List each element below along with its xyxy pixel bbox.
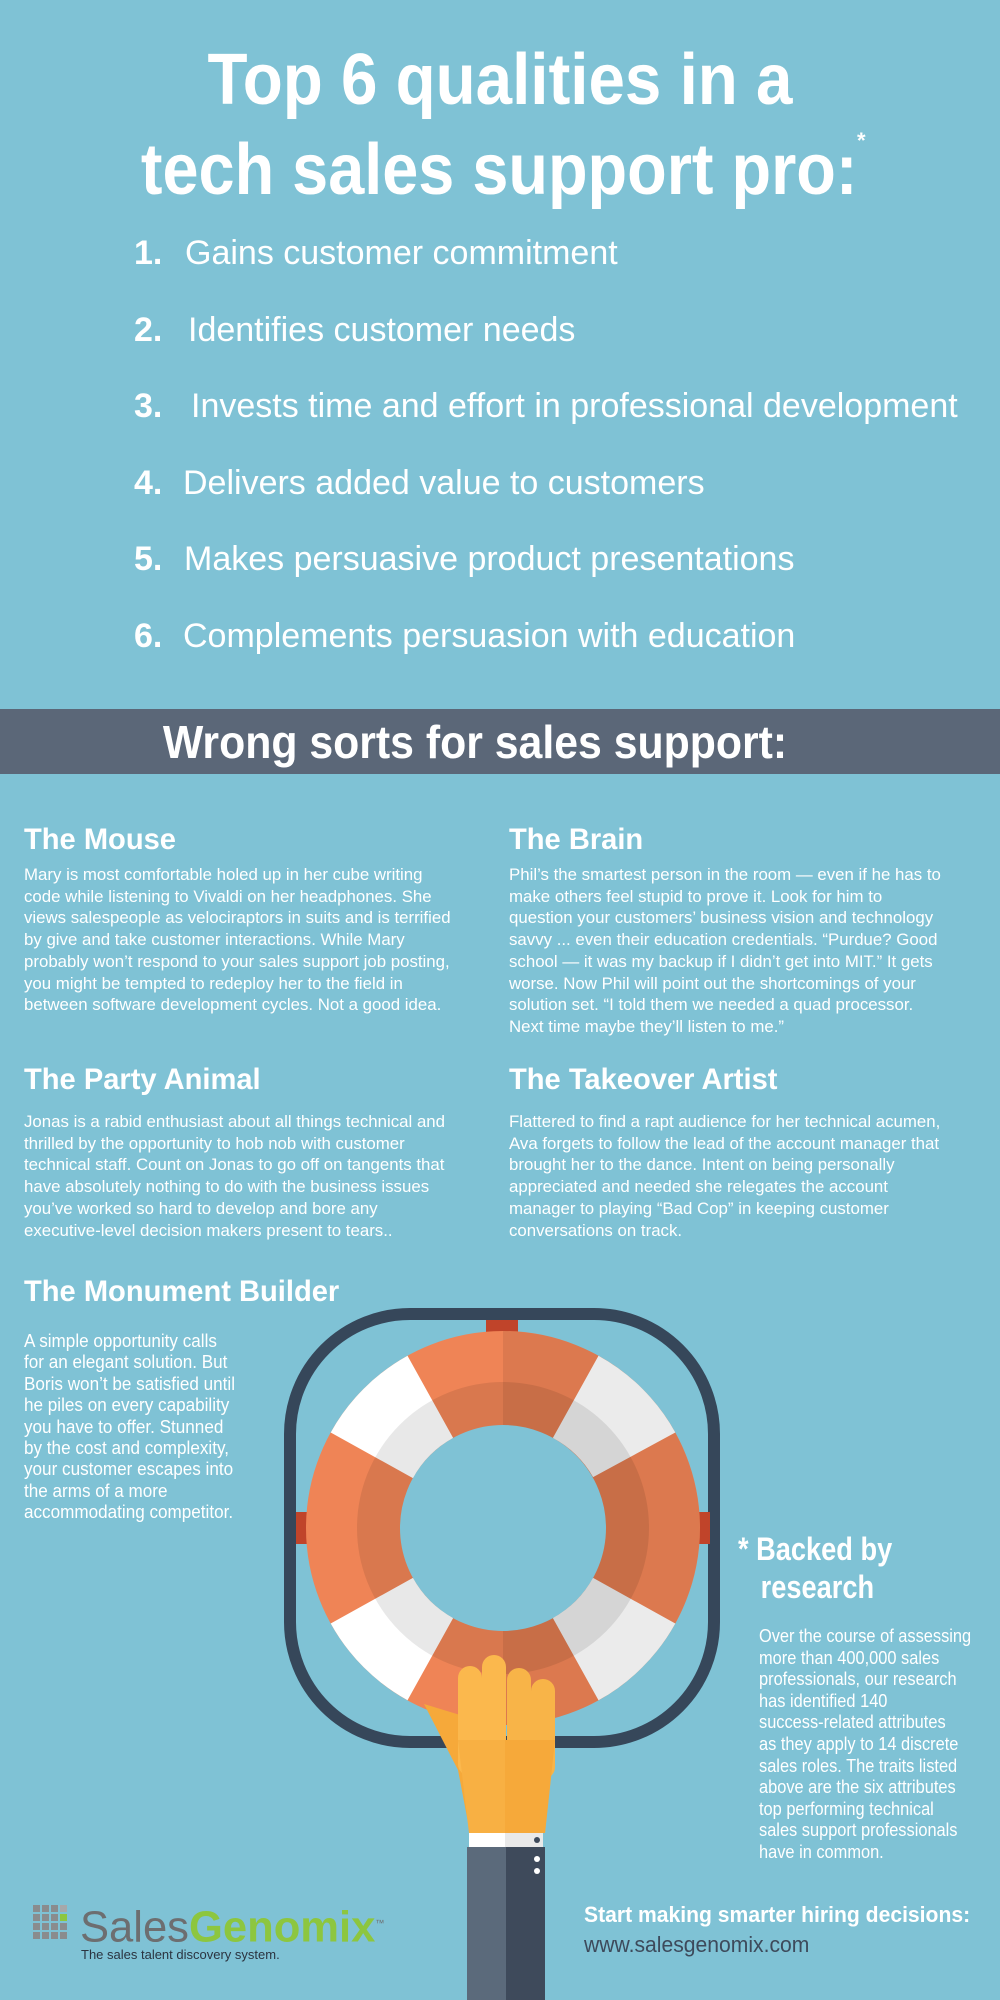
text: party animal: have absolutely nothing to do with the business issues	[24, 1177, 429, 1196]
text: research: as they apply to 14 discrete	[759, 1734, 958, 1754]
qualities list: Identifies customer needs	[188, 311, 575, 349]
text: research: have in common.	[759, 1842, 884, 1862]
hand	[424, 1655, 555, 1833]
text: brain: savvy ... even their education credentials. “Purdue? Good	[509, 930, 937, 949]
text: takeover artist	[509, 1112, 940, 1240]
text: takeover artist: appreciated and needed she relegates the account	[509, 1177, 888, 1196]
heading: backed by research: research	[761, 1569, 874, 1605]
text: brain: solution set. “I told them we needed a quad processor.	[509, 995, 913, 1014]
panel: the party animal	[24, 1063, 445, 1240]
heading: backed by research: * Backed by	[738, 1531, 892, 1567]
text: research: sales roles. The traits listed	[759, 1756, 957, 1776]
heading: party animal: The Party Animal	[24, 1063, 261, 1096]
item 1: 1.	[134, 234, 162, 272]
title: *	[857, 128, 866, 153]
text: monument builder: accommodating competitor.	[24, 1502, 233, 1522]
qualities list: Invests time and effort in professional development	[191, 387, 958, 425]
text: party animal: Jonas is a rabid enthusiast about all things technical and	[24, 1112, 445, 1131]
text: monument builder: for an elegant solution. But	[24, 1352, 227, 1372]
text: monument builder: A simple opportunity calls	[24, 1331, 217, 1351]
panel: the mouse	[24, 823, 451, 1014]
text: research: Over the course of assessing	[759, 1626, 971, 1646]
text: monument builder: the arms of a more	[24, 1481, 168, 1501]
text: brain: Phil’s the smartest person in the room — even if he has to	[509, 865, 941, 884]
text: mouse: views salespeople as velociraptors in suits and is terrified	[24, 908, 451, 927]
text: brain: school — it was my backup if I didn’t get into MIT.” It gets	[509, 952, 933, 971]
qualities list	[134, 234, 958, 655]
text: party animal	[24, 1112, 445, 1240]
item 3	[134, 387, 958, 425]
call to action: www.salesgenomix.com	[584, 1932, 809, 1957]
text: takeover artist: conversations on track.	[509, 1221, 682, 1240]
text: brain: Next time maybe they’ll listen to me.”	[509, 1017, 784, 1036]
item 4: 4.	[134, 464, 162, 502]
title: Top 6 qualities in a	[208, 40, 792, 120]
text: monument builder: Boris won’t be satisfied until	[24, 1374, 235, 1394]
wordmark: SalesGenomix™	[80, 1903, 384, 1952]
text: mouse: probably won’t respond to your sales support job posting,	[24, 952, 450, 971]
qualities list: Complements persuasion with education	[183, 617, 795, 655]
text: monument builder	[24, 1331, 235, 1522]
item 1	[134, 234, 618, 272]
text: research	[759, 1626, 971, 1862]
text: mouse: by give and take customer interactions. While Mary	[24, 930, 405, 949]
text: brain: worse. Now Phil will point out the shortcomings of your	[509, 974, 916, 993]
qualities list: Makes persuasive product presentations	[184, 540, 794, 578]
text: research: above are the six attributes	[759, 1777, 956, 1797]
text: research: success-related attributes	[759, 1712, 946, 1732]
panel: the monument builder	[24, 1275, 339, 1522]
callout: backed by research	[738, 1531, 971, 1862]
text: takeover artist: Ava forgets to follow the lead of the account manager that	[509, 1134, 939, 1153]
text: takeover artist: brought her to the dance. Intent on being personally	[509, 1155, 894, 1174]
text: monument builder: by the cost and complexity,	[24, 1438, 229, 1458]
item 2	[134, 311, 575, 349]
text: party animal: you’ve worked so hard to develop and bore any	[24, 1199, 378, 1218]
item 3: 3.	[134, 387, 162, 425]
text: monument builder: you have to offer. Stunned	[24, 1417, 223, 1437]
title: tech sales support pro:	[141, 130, 857, 210]
heading: monument builder: The Monument Builder	[24, 1275, 339, 1308]
text: research: top performing technical	[759, 1799, 934, 1819]
item 4	[134, 464, 705, 502]
heading: backed by research	[738, 1531, 892, 1605]
item 6	[134, 617, 795, 655]
heading: the brain: The Brain	[509, 823, 643, 856]
text: takeover artist: Flattered to find a rapt audience for her technical acumen,	[509, 1112, 940, 1131]
call to action	[584, 1902, 970, 1957]
icon: dot grid	[33, 1905, 67, 1939]
text: research: professionals, our research	[759, 1669, 957, 1689]
text: brain: make others feel stupid to prove it. Look for him to	[509, 887, 882, 906]
text: research: has identified 140	[759, 1691, 887, 1711]
title	[141, 40, 866, 210]
item 5: 5.	[134, 540, 162, 578]
item 6: 6.	[134, 617, 162, 655]
logo: salesgenomix	[33, 1903, 384, 1962]
call to action: Start making smarter hiring decisions:	[584, 1902, 970, 1927]
panel: the takeover artist	[509, 1063, 940, 1240]
text: research: sales support professionals	[759, 1820, 957, 1840]
text: party animal: executive-level decision makers present to tears..	[24, 1221, 393, 1240]
text: mouse: code while listening to Vivaldi on her headphones. She	[24, 887, 432, 906]
text: mouse: you might be tempted to redeploy her to the field in	[24, 974, 403, 993]
text: mouse	[24, 865, 451, 1014]
text: party animal: technical staff. Count on Jonas to go off on tangents that	[24, 1155, 444, 1174]
heading: takeover artist: The Takeover Artist	[509, 1063, 777, 1096]
text: monument builder: your customer escapes into	[24, 1459, 233, 1479]
text: party animal: thrilled by the opportunity to hob nob with customer	[24, 1134, 405, 1153]
heading: the mouse: The Mouse	[24, 823, 176, 856]
item 2: 2.	[134, 311, 162, 349]
sleeve	[467, 1833, 545, 2000]
text: brain: question your customers’ business vision and technology	[509, 908, 933, 927]
banner: wrong sorts: Wrong sorts for sales support:	[163, 716, 787, 768]
text: mouse: between software development cycles. Not a good idea.	[24, 995, 441, 1014]
banner: wrong sorts	[0, 709, 1000, 774]
text: mouse: Mary is most comfortable holed up in her cube writing	[24, 865, 422, 884]
illustration: lifebuoy held by hand	[284, 1308, 720, 2000]
tabs	[296, 1320, 710, 1544]
text: brain	[509, 865, 941, 1036]
lifebuoy ring	[331, 1331, 700, 1725]
frame	[290, 1314, 714, 1742]
panel: the brain	[509, 823, 941, 1036]
qualities list: Gains customer commitment	[185, 234, 618, 272]
text: research: more than 400,000 sales	[759, 1648, 939, 1668]
qualities list: Delivers added value to customers	[183, 464, 705, 502]
tagline: The sales talent discovery system.	[81, 1947, 280, 1962]
text: takeover artist: manager to playing “Bad Cop” in keeping customer	[509, 1199, 889, 1218]
text: monument builder: he piles on every capability	[24, 1395, 229, 1415]
item 5	[134, 540, 794, 578]
